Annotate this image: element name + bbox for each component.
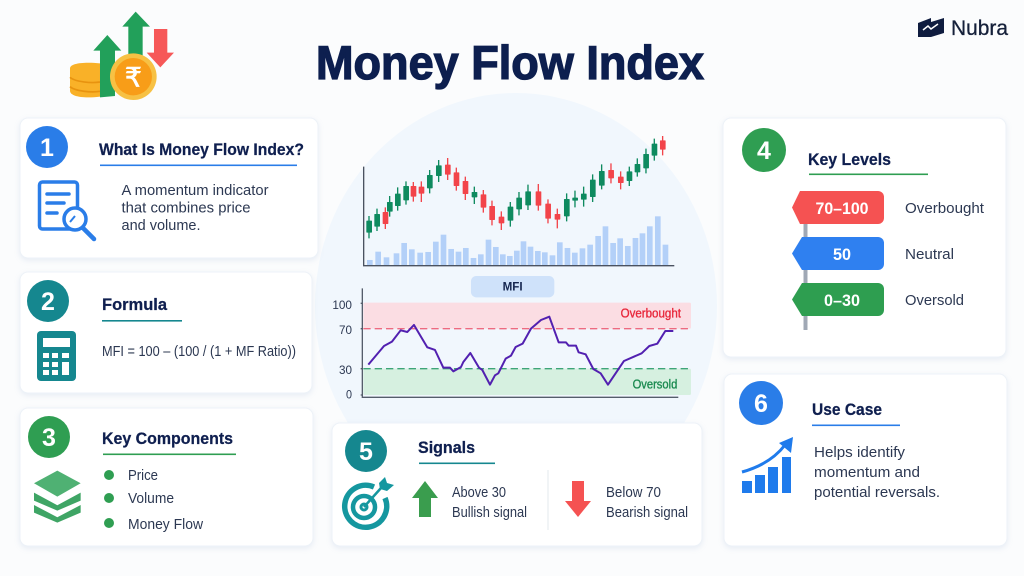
heading: Key Levels xyxy=(808,150,891,169)
description: Helps identify xyxy=(814,444,906,461)
label: oversold: Oversold xyxy=(905,292,964,309)
panel: what is money flow index xyxy=(20,118,318,258)
list: components xyxy=(104,467,203,533)
icon: coins and arrows: ₹ xyxy=(125,62,142,92)
red candles xyxy=(383,136,666,230)
green candles xyxy=(366,139,657,238)
list: components: Price xyxy=(128,467,158,484)
tag: 70–100: 70–100 xyxy=(816,200,868,218)
badge 2 xyxy=(27,280,69,322)
oversold band xyxy=(363,369,691,395)
heading: Key Components xyxy=(102,429,233,448)
bearish text xyxy=(606,485,688,521)
logo: Nubra: Nubra xyxy=(951,17,1008,40)
description: momentum and xyxy=(814,464,920,481)
candlestick chart with volume xyxy=(364,136,674,266)
tag: 50 xyxy=(792,237,884,270)
label: overbought: Overbought xyxy=(621,307,681,321)
title: Money Flow Index xyxy=(316,36,704,89)
arrow: up xyxy=(412,481,438,517)
icon: calculator xyxy=(37,331,76,381)
badge 6 xyxy=(739,381,783,425)
badge 5: 5 xyxy=(359,438,373,466)
description: and volume. xyxy=(122,217,200,234)
badge 1: 1 xyxy=(40,134,54,162)
axis labels: 100 xyxy=(332,298,352,312)
badge 3 xyxy=(28,416,70,458)
MFI pill label xyxy=(471,276,554,297)
badge 3: 3 xyxy=(42,424,56,452)
list: components: Money Flow xyxy=(128,516,203,533)
panel: key levels xyxy=(723,118,1006,357)
pole xyxy=(804,215,808,330)
arrow: down xyxy=(565,481,591,517)
MFI pill label: MFI xyxy=(503,281,523,294)
axis labels: 70 xyxy=(339,323,352,337)
icon: layers xyxy=(34,471,81,523)
label: overbought: Overbought xyxy=(905,200,985,217)
badge 6: 6 xyxy=(754,390,768,418)
bullish text: Above 30 xyxy=(452,485,506,501)
MFI line xyxy=(368,317,673,385)
description: A momentum indicator xyxy=(122,182,269,199)
description xyxy=(122,182,269,234)
heading: Use Case xyxy=(812,400,882,419)
background circle xyxy=(315,93,717,519)
tag: 50: 50 xyxy=(833,246,851,264)
panel: formula xyxy=(20,272,312,393)
badge 2: 2 xyxy=(41,288,55,316)
label: oversold: Oversold xyxy=(633,377,677,391)
panel: use case xyxy=(724,374,1007,546)
axis labels: 30 xyxy=(339,363,352,377)
bullish text: Bullish signal xyxy=(452,505,527,521)
description: that combines price xyxy=(122,200,250,216)
icon: document with magnifier xyxy=(40,182,94,239)
list: components: Volume xyxy=(128,490,174,507)
icon: target xyxy=(345,477,394,527)
panel: key components xyxy=(20,408,313,546)
formula text: MFI = 100 – (100 / (1 + MF Ratio)) xyxy=(102,344,296,360)
tag: 70–100 xyxy=(792,191,884,224)
overbought band xyxy=(363,303,691,329)
axis labels xyxy=(332,298,352,402)
label: neutral: Neutral xyxy=(905,246,954,263)
description: potential reversals. xyxy=(814,484,940,501)
heading: Signals xyxy=(418,438,475,457)
icon: growth chart xyxy=(742,437,793,493)
bearish text: Below 70 xyxy=(606,485,661,501)
badge 5 xyxy=(345,430,387,472)
volume bars xyxy=(367,216,668,265)
icon: coins and arrows xyxy=(70,12,174,100)
bullish text xyxy=(452,485,527,521)
logo: Nubra xyxy=(918,17,1008,40)
bearish text: Bearish signal xyxy=(606,505,688,521)
badge 1 xyxy=(26,126,68,168)
heading: Formula xyxy=(102,295,168,314)
MFI chart xyxy=(332,276,691,402)
tag: 0–30: 0–30 xyxy=(824,292,860,310)
badge 4 xyxy=(742,128,786,172)
badge 4: 4 xyxy=(757,137,771,165)
panel: signals xyxy=(332,423,702,546)
axis labels: 0 xyxy=(346,388,352,402)
description xyxy=(814,444,940,501)
tag: 0–30 xyxy=(792,283,884,316)
heading: What Is Money Flow Index? xyxy=(99,140,304,159)
